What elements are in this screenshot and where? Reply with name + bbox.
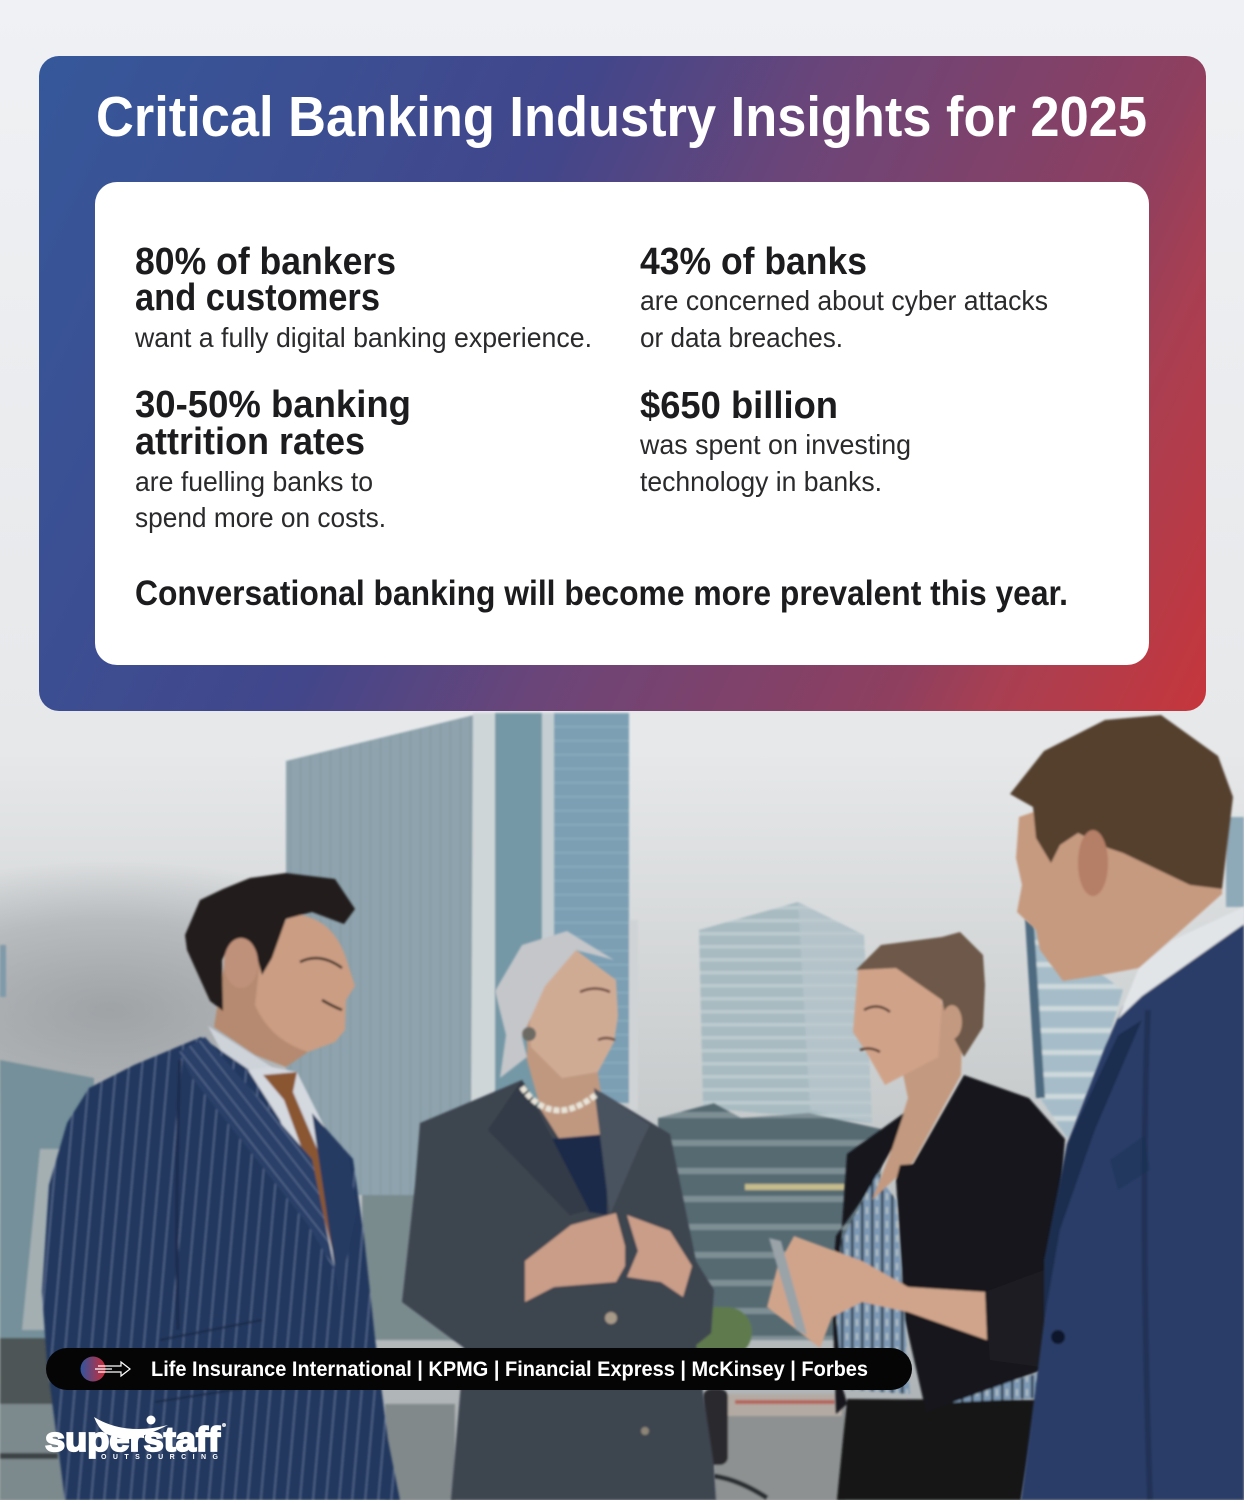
- ear: [1078, 830, 1108, 896]
- bollard and chain: [703, 1389, 728, 1465]
- low-rise block: [658, 1103, 881, 1340]
- person: woman in black jacket: [767, 932, 1065, 1500]
- central tower: [286, 713, 482, 1195]
- insight: $650 billion: technology in banks.: [640, 466, 882, 497]
- logo: superstaff outsourcing: OUTSOURCING: [101, 1454, 219, 1461]
- jacket: [402, 1080, 716, 1500]
- conclusion statement: Conversational banking will become more prevalent this year.: [135, 574, 1068, 613]
- phone: [769, 1238, 807, 1335]
- chest and neck: [872, 1000, 962, 1200]
- overcast cloud on left: [0, 860, 440, 1160]
- insight: 80% of bankers and customers: want a fully digital banking experience.: [134, 322, 592, 353]
- insight: $650 billion: [639, 385, 911, 497]
- blouse: [836, 1174, 910, 1394]
- title: Critical Banking Industry Insights for 2025: [96, 85, 1147, 149]
- person: man in navy suit: [1010, 715, 1244, 1500]
- insight: 43% of banks: 43% of banks: [640, 241, 867, 283]
- arm and hand: [767, 1236, 987, 1348]
- neck and face: [1016, 807, 1222, 981]
- sources bar: [46, 1348, 912, 1390]
- person: man in pinstripe suit: [42, 873, 400, 1500]
- neck: [527, 1000, 607, 1139]
- insight: 30-50% banking attrition rates: [135, 384, 411, 533]
- insight: 43% of banks: are concerned about cyber attacks: [640, 285, 1048, 316]
- insight: 30-50% banking attrition rates: spend more on costs.: [135, 502, 386, 533]
- insight: $650 billion: was spent on investing: [639, 429, 911, 460]
- collar: [1118, 907, 1244, 1019]
- insight: 80% of bankers and customers: 80% of bankers: [135, 241, 396, 283]
- white content panel: [95, 182, 1149, 665]
- background skyline buildings: [0, 713, 1244, 1500]
- icon: source arrow: [80, 1356, 130, 1382]
- ear: [224, 938, 258, 988]
- face: [530, 950, 618, 1078]
- sleeve cuff: [985, 1268, 1050, 1368]
- suit body: [42, 1037, 400, 1500]
- second tower: [699, 902, 872, 1123]
- face: [853, 965, 942, 1085]
- person: older woman with silver hair: [402, 931, 716, 1500]
- face: [255, 914, 355, 1052]
- silver hair: [495, 931, 614, 1078]
- insight: 80% of bankers and customers: and customers: [135, 277, 380, 319]
- jacket: [896, 1075, 1065, 1412]
- logo: superstaff outsourcing: superstaff: [45, 1421, 221, 1459]
- hair: [185, 873, 355, 1011]
- hair: [1010, 715, 1233, 889]
- hands: [525, 1213, 625, 1302]
- insight: 30-50% banking attrition rates: 30-50% banking: [135, 384, 411, 426]
- water: [0, 1404, 90, 1500]
- right tower: [1025, 919, 1123, 1139]
- blouse: [549, 1134, 607, 1215]
- neck and shirt: [208, 1026, 348, 1241]
- insight: 30-50% banking attrition rates: are fuelling banks to: [135, 466, 373, 497]
- earring: [522, 1027, 536, 1041]
- insight: 43% of banks: [640, 241, 1048, 353]
- insight: 30-50% banking attrition rates: attrition rates: [135, 421, 365, 463]
- insight: $650 billion: $650 billion: [640, 385, 838, 427]
- suit: [1021, 924, 1244, 1500]
- main gradient card: [39, 56, 1206, 711]
- insight: 80% of bankers and customers: [134, 241, 592, 353]
- source list: Life Insurance International | KPMG | Financial Express | McKinsey | Forbes: [151, 1358, 868, 1381]
- hair: [856, 932, 985, 1057]
- lapels: [179, 1037, 335, 1271]
- buttons: [605, 1312, 617, 1324]
- lapels: [488, 1080, 589, 1215]
- trousers: [837, 1399, 1038, 1500]
- left waterfront building: [0, 1060, 94, 1404]
- necklace: [522, 1087, 597, 1110]
- insight: 43% of banks: or data breaches.: [640, 322, 843, 353]
- tie: [263, 1072, 341, 1277]
